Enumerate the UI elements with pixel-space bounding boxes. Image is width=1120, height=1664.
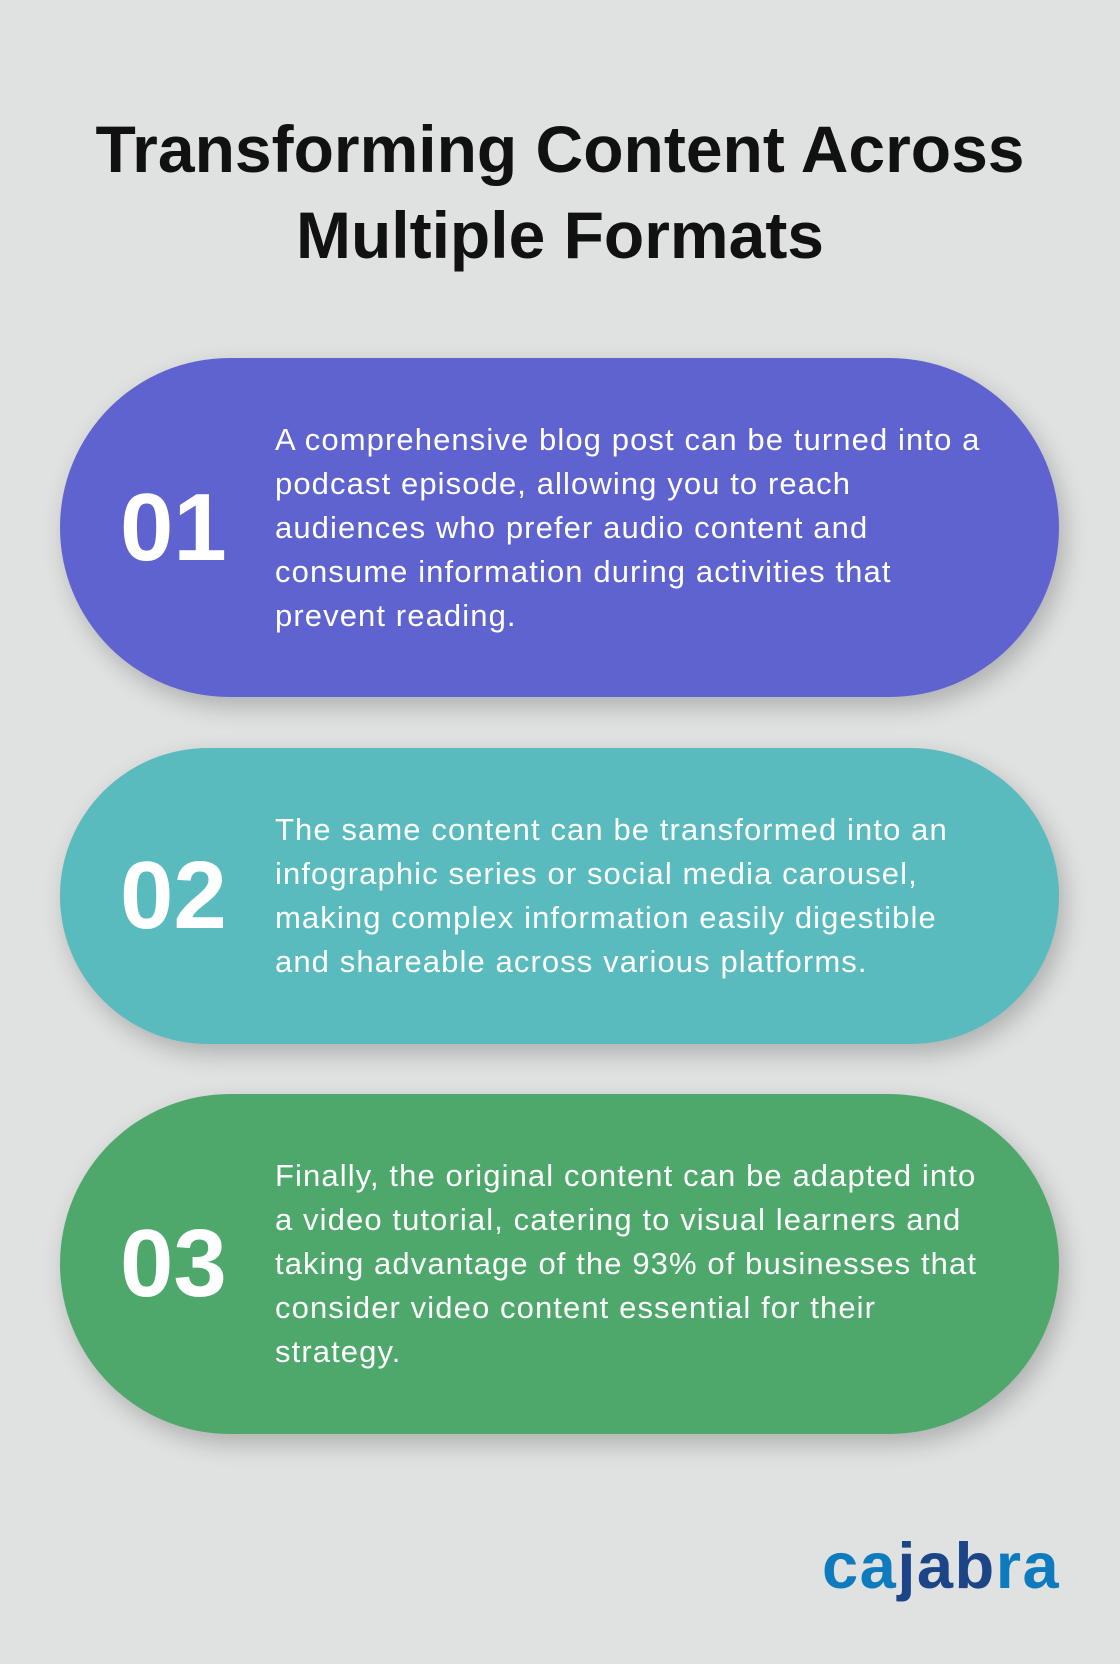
text 03: Finally, the original content can be adapted into a video tutorial, catering to visual learners and taking advantage of the 93% of businesses that consider video content essential for their strategy. [275,1158,977,1369]
logo: cajabra [822,1529,1060,1602]
panel: step 01 [60,358,1059,697]
panel: step 02 [60,748,1059,1044]
number 03: 03 [120,1210,227,1317]
number 01: 01 [120,474,227,580]
panel: step 03 [60,1094,1059,1434]
title [96,112,1024,272]
title: Transforming Content Across [96,112,1024,186]
text 01: A comprehensive blog post can be turned into a podcast episode, allowing you to reach audiences who prefer audio content and consume information during activities that prevent reading. [275,422,980,632]
number 02: 02 [120,842,227,949]
title: Multiple Formats [296,198,824,272]
text 02: The same content can be transformed into an infographic series or social media carousel, making complex information easily digestible and shareable across various platforms. [275,812,948,979]
